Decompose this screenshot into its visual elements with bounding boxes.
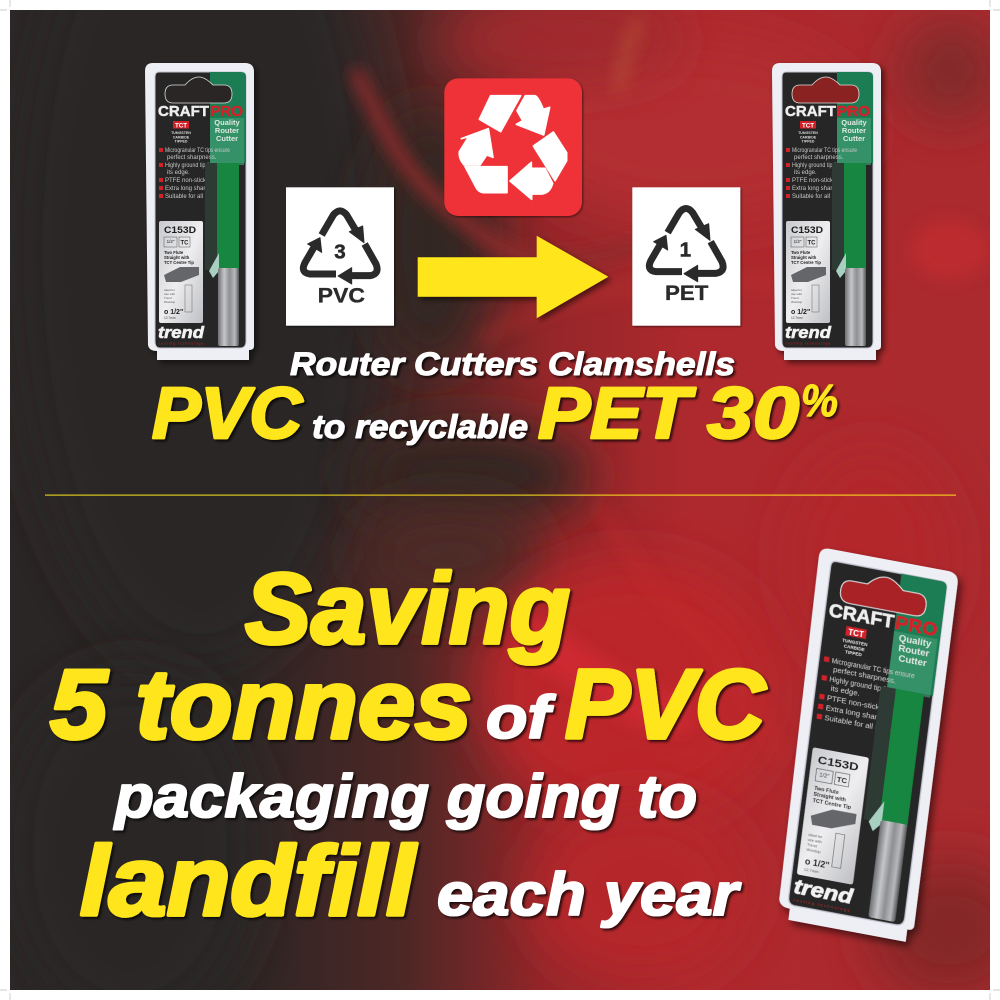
arrow: yellow PVC to PET xyxy=(418,236,608,318)
product pack: left clamshell: Straight with xyxy=(164,255,190,260)
product pack: large tilted clamshell: PTFE non-stick coating xyxy=(826,693,907,717)
product pack: large tilted clamshell: TUNGSTEN xyxy=(842,638,868,647)
product pack: large tilted clamshell: 1/2" xyxy=(819,773,830,780)
product pack: right clamshell: its edge. xyxy=(794,170,817,176)
product pack: large tilted clamshell: TCT xyxy=(848,628,864,639)
product pack: left clamshell: CARBIDE xyxy=(173,135,190,139)
product pack: left clamshell: Trend xyxy=(164,296,172,300)
product pack: right clamshell: Straight with xyxy=(791,255,817,260)
product pack: right clamshell: TCT Centre Tip xyxy=(791,260,821,265)
product pack: large tilted clamshell: Straight with xyxy=(813,792,846,804)
product pack: right clamshell: Router xyxy=(842,126,866,135)
product pack: left clamshell: CRAFT xyxy=(158,104,209,120)
heading: 5 tonnes of PVC: of xyxy=(486,684,556,751)
product pack: right clamshell: TCT xyxy=(802,122,814,129)
product pack: right clamshell: o 1/2" xyxy=(791,309,810,316)
product pack: large tilted clamshell: use with xyxy=(807,838,822,844)
product pack: left clamshell: perfect sharpness. xyxy=(167,155,217,161)
product pack: left clamshell: TCT xyxy=(175,122,187,129)
icon: triangle of arrows 1 xyxy=(649,208,723,282)
heading: landfill each year xyxy=(80,826,742,936)
product pack: right clamshell: PTFE non-stick coating xyxy=(792,178,854,184)
product pack: left clamshell xyxy=(145,63,254,360)
product pack: left clamshell: routing technology xyxy=(159,342,203,346)
text: packaging going to: packaging going to xyxy=(113,763,697,830)
heading: Saving: Saving xyxy=(245,553,570,665)
product pack: left clamshell: C153D xyxy=(164,225,197,235)
panel: PVC code 3 symbol xyxy=(286,187,394,326)
heading: PVC to recyclable PET 30%: PVC xyxy=(152,374,303,454)
divider xyxy=(45,495,956,496)
panel: PET code 1 symbol xyxy=(632,187,740,326)
product pack: large tilted clamshell: PRO xyxy=(894,612,939,640)
product pack: left clamshell: Router xyxy=(215,126,239,135)
product pack: large tilted clamshell xyxy=(773,547,959,943)
product pack: right clamshell: 1/2" xyxy=(794,239,802,244)
product pack: left clamshell: PRO xyxy=(210,104,243,120)
product pack: left clamshell: Quality xyxy=(214,118,241,127)
heading: 5 tonnes of PVC: 5 tonnes xyxy=(50,649,472,759)
heading: PVC to recyclable PET 30% xyxy=(152,374,838,454)
product pack: left clamshell: TIPPED xyxy=(175,140,188,144)
product pack: left clamshell: Worktop xyxy=(164,300,175,304)
icon: triangle of arrows 3 xyxy=(303,211,377,284)
product pack: left clamshell: Microgranular TC tips ensure xyxy=(165,148,231,154)
product pack: left clamshell: TCT Centre Tip xyxy=(164,260,194,265)
heading: PVC to recyclable PET 30%: 30 xyxy=(707,374,799,454)
product pack: left clamshell: Suitable for all makes xyxy=(165,194,222,200)
product pack: right clamshell: routing technology xyxy=(786,342,830,346)
product pack: right clamshell: Two Flute xyxy=(791,250,811,255)
icon: red recycling badge xyxy=(444,78,582,216)
product pack: large tilted clamshell: perfect sharpness. xyxy=(833,665,897,686)
panel: PET code 1 symbol: 1 xyxy=(680,238,691,261)
product pack: right clamshell: Worktop xyxy=(791,300,802,304)
product pack: right clamshell: TIPPED xyxy=(802,140,815,144)
product pack: right clamshell: PRO xyxy=(837,104,870,120)
product pack: right clamshell: C153D xyxy=(791,225,824,235)
panel: PVC code 3 symbol: PVC xyxy=(318,282,365,307)
heading: 5 tonnes of PVC xyxy=(50,649,766,759)
product pack: left clamshell: TC xyxy=(180,240,189,246)
product pack: right clamshell xyxy=(772,63,881,360)
heading: PVC to recyclable PET 30%: PET xyxy=(538,374,697,454)
product pack: large tilted clamshell: trend xyxy=(793,875,855,909)
heading: PVC to recyclable PET 30%: % xyxy=(801,375,838,426)
heading: landfill each year: each year xyxy=(437,861,742,928)
panel: PET code 1 symbol: PET xyxy=(665,280,708,305)
product pack: right clamshell: 12.7mm xyxy=(791,316,803,320)
product pack: left clamshell: Two Flute xyxy=(164,250,184,255)
product pack: large tilted clamshell: 12.7mm xyxy=(804,867,820,874)
product pack: right clamshell: Microgranular TC tips ensure xyxy=(792,148,858,154)
product pack: right clamshell: Trend xyxy=(791,296,799,300)
product pack: large tilted clamshell: Quality xyxy=(898,633,933,650)
product pack: right clamshell: use with xyxy=(791,292,802,296)
product pack: right clamshell: CRAFT xyxy=(785,104,836,120)
product pack: right clamshell: TC xyxy=(808,240,816,246)
product pack: left clamshell: o 1/2" xyxy=(164,309,183,316)
product pack: right clamshell: Extra long shank. xyxy=(792,186,839,192)
product pack: left clamshell: Extra long shank. xyxy=(165,186,212,192)
product pack: right clamshell: Ideal for xyxy=(791,288,802,292)
product pack: left clamshell: trend xyxy=(158,324,205,342)
heading: Router Cutters Clamshells: Router Cutters Clamshells xyxy=(290,346,735,382)
product pack: large tilted clamshell: Extra long shank. xyxy=(825,703,885,723)
product pack: left clamshell: 1/2" xyxy=(167,239,175,244)
product pack: large tilted clamshell: Cutter xyxy=(898,653,928,669)
product pack: left clamshell: PTFE non-stick coating xyxy=(165,178,227,184)
product pack: large tilted clamshell: o 1/2" xyxy=(804,856,830,871)
product pack: right clamshell: TUNGSTEN xyxy=(798,131,818,135)
heading: PVC to recyclable PET 30%: to recyclable xyxy=(312,408,528,445)
product pack: large tilted clamshell: Suitable for all makes xyxy=(824,713,898,736)
product pack: left clamshell: its edge. xyxy=(167,170,190,176)
product pack: right clamshell: Suitable for all makes xyxy=(792,194,849,200)
product pack: large tilted clamshell: CRAFT xyxy=(828,600,896,632)
product pack: large tilted clamshell: C153D xyxy=(817,755,859,774)
heading: landfill each year: landfill xyxy=(80,826,417,936)
panel: PVC code 3 symbol: 3 xyxy=(334,241,346,264)
product pack: large tilted clamshell: Two Flute xyxy=(814,786,839,796)
product pack: right clamshell: Quality xyxy=(841,118,868,127)
product pack: large tilted clamshell: its edge. xyxy=(830,684,860,698)
product pack: large tilted clamshell: Microgranular TC tips ensure xyxy=(831,656,915,680)
product pack: right clamshell: trend xyxy=(785,324,832,342)
heading: 5 tonnes of PVC: PVC xyxy=(565,649,766,759)
product pack: large tilted clamshell: TC xyxy=(836,775,848,786)
product pack: large tilted clamshell: TCT Centre Tip xyxy=(812,798,852,811)
product pack: large tilted clamshell: CARBIDE xyxy=(843,644,865,652)
product pack: large tilted clamshell: Ideal for xyxy=(808,833,823,839)
product pack: right clamshell: perfect sharpness. xyxy=(794,155,844,161)
product pack: large tilted clamshell: Trend xyxy=(807,843,817,848)
product pack: left clamshell: Highly ground tip faces xyxy=(165,163,220,169)
product pack: large tilted clamshell: routing technology xyxy=(793,897,851,913)
product pack: left clamshell: TUNGSTEN xyxy=(171,131,191,135)
product pack: large tilted clamshell: TIPPED xyxy=(845,649,863,657)
product pack: left clamshell: Cutter xyxy=(216,134,238,143)
product pack: right clamshell: Highly ground tip faces xyxy=(792,163,847,169)
product pack: left clamshell: Ideal for xyxy=(164,288,175,292)
product pack: left clamshell: 12.7mm xyxy=(164,316,176,320)
product pack: right clamshell: CARBIDE xyxy=(800,135,817,139)
product pack: large tilted clamshell: Worktop xyxy=(806,848,821,854)
product pack: left clamshell: use with xyxy=(164,292,175,296)
product pack: right clamshell: Cutter xyxy=(843,134,865,143)
product pack: large tilted clamshell: Router xyxy=(898,643,930,660)
product pack: large tilted clamshell: Highly ground tip faces xyxy=(829,675,900,696)
